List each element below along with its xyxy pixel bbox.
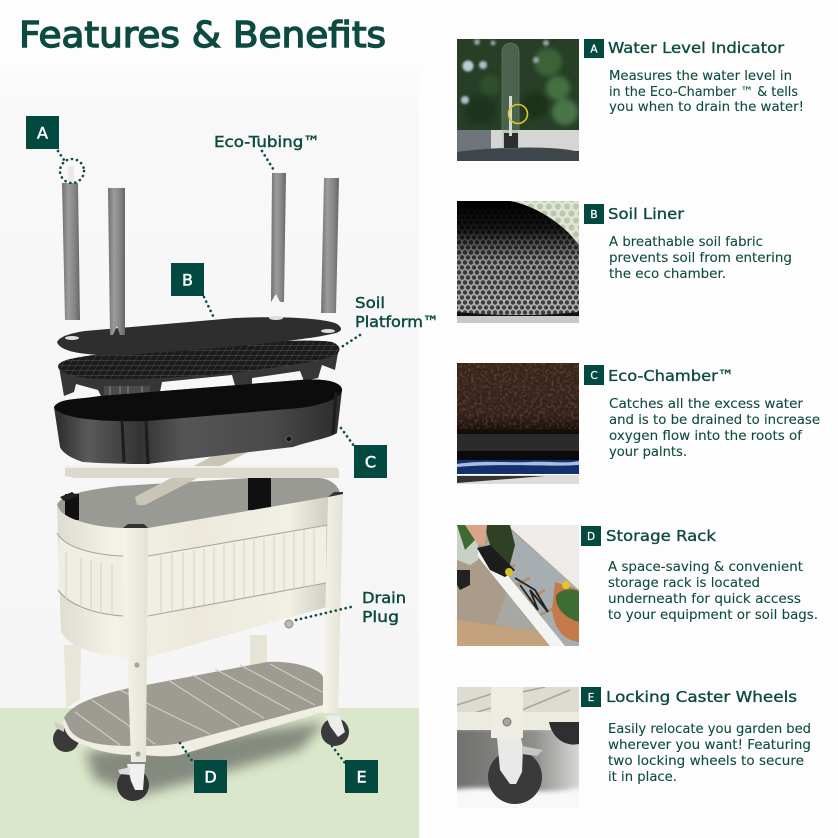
description: storage rack is located xyxy=(608,576,760,591)
label: Drain Plug xyxy=(362,589,406,626)
description: your palnts. xyxy=(609,445,687,460)
cross supports xyxy=(65,467,339,478)
description: Catches all the excess water xyxy=(609,397,804,412)
photo: soil liner mesh xyxy=(457,201,579,323)
dotted leader D xyxy=(180,743,193,762)
description: you when to drain the water! xyxy=(609,100,804,115)
right wheel xyxy=(321,718,349,746)
description: two locking wheels to secure xyxy=(608,754,804,769)
soil liner sheet xyxy=(57,317,341,355)
dotted leader Soil Platform xyxy=(340,335,360,348)
heading: Eco-Chamber™ xyxy=(608,367,734,385)
label: Soil Platform: Platform™ xyxy=(355,313,439,331)
label: Drain Plug: Plug xyxy=(362,608,399,626)
badge E xyxy=(581,687,601,707)
badge E xyxy=(345,760,378,793)
badge B: B xyxy=(590,209,598,221)
description: A breathable soil fabric xyxy=(609,235,763,250)
soil platform xyxy=(58,341,339,398)
floor shadow xyxy=(85,722,325,795)
description: wherever you want! Featuring xyxy=(608,738,811,753)
eco-tubes upper xyxy=(62,166,339,320)
badge A xyxy=(26,116,59,149)
badge B xyxy=(584,204,604,224)
dotted leader E xyxy=(332,746,345,763)
tube 4 xyxy=(321,178,339,313)
dotted leader A xyxy=(58,151,66,163)
badge C xyxy=(354,445,387,478)
feature D: storage rack xyxy=(457,525,818,646)
description: to your equipment or soil bags. xyxy=(608,608,818,623)
description xyxy=(608,722,811,785)
label: Eco-Tubing: Eco-Tubing™ xyxy=(214,133,320,151)
badge B xyxy=(171,263,204,296)
water level indicator tip xyxy=(68,166,74,183)
badge E: E xyxy=(588,692,594,704)
planter exploded diagram xyxy=(26,116,439,801)
feature E: locking caster wheels xyxy=(450,687,811,808)
left front leg xyxy=(123,528,148,762)
description xyxy=(609,397,820,460)
photo: tools on rack xyxy=(457,525,579,646)
feature A: water level indicator xyxy=(457,39,804,161)
description xyxy=(609,235,792,282)
left product panel xyxy=(0,65,419,708)
badge A: A xyxy=(590,44,598,56)
description: the eco chamber. xyxy=(609,267,726,282)
description: Easily relocate you garden bed xyxy=(608,722,811,737)
title: Features & Benefits xyxy=(19,15,386,56)
badge C: C xyxy=(590,370,598,382)
badge D: D xyxy=(204,768,217,786)
photo: caster wheel xyxy=(457,687,579,804)
badge B: B xyxy=(182,270,193,290)
rear left wheel xyxy=(53,722,79,752)
description: it in place. xyxy=(608,770,677,785)
cross brace xyxy=(135,451,250,505)
tube 1 xyxy=(62,183,80,320)
description: oxygen flow into the roots of xyxy=(609,429,802,444)
storage rack shelf xyxy=(63,662,325,795)
badge D xyxy=(194,760,227,793)
description: Measures the water level in xyxy=(609,69,792,84)
photo: layers cross-section xyxy=(457,363,579,484)
label: Soil Platform xyxy=(355,294,439,331)
description: A space-saving & convenient xyxy=(608,560,803,575)
dotted leader B xyxy=(204,297,214,318)
badge A xyxy=(584,39,604,58)
badge C: C xyxy=(365,452,376,472)
dotted leader C xyxy=(341,428,354,446)
description xyxy=(608,560,818,623)
dotted leader Drain Plug xyxy=(296,606,355,620)
dotted leader Eco-Tubing xyxy=(262,151,275,172)
drain plug xyxy=(285,620,293,628)
heading: Storage Rack xyxy=(606,527,716,545)
eco-chamber xyxy=(54,379,342,464)
liner holes xyxy=(65,316,335,340)
right leg xyxy=(323,494,343,713)
badge D: D xyxy=(587,531,595,543)
description: prevents soil from entering xyxy=(609,251,792,266)
feature B: soil liner xyxy=(457,201,792,323)
badge C xyxy=(584,365,604,385)
photo: water level tube xyxy=(457,39,579,161)
badge D xyxy=(581,526,601,546)
heading: Soil Liner xyxy=(608,205,685,223)
description: and is to be drained to increase xyxy=(609,413,820,428)
front wheel xyxy=(117,769,149,801)
planter legs xyxy=(60,492,343,762)
badge E: E xyxy=(356,768,367,786)
green floor xyxy=(0,708,419,838)
tube 3 xyxy=(271,173,286,302)
wheels xyxy=(117,716,349,801)
tube 2 xyxy=(108,188,125,335)
description: in the Eco-Chamber ™ & tells xyxy=(609,85,798,100)
heading: Locking Caster Wheels xyxy=(606,688,797,706)
label: Drain Plug: Drain xyxy=(362,589,406,607)
planter tub xyxy=(57,478,340,708)
description: underneath for quick access xyxy=(608,592,801,607)
dotted circle A xyxy=(60,159,84,183)
description xyxy=(609,69,804,115)
heading: Water Level Indicator xyxy=(608,39,785,57)
label: Soil Platform: Soil xyxy=(355,294,385,312)
badge A: A xyxy=(37,124,48,142)
feature C: eco-chamber xyxy=(457,363,820,484)
